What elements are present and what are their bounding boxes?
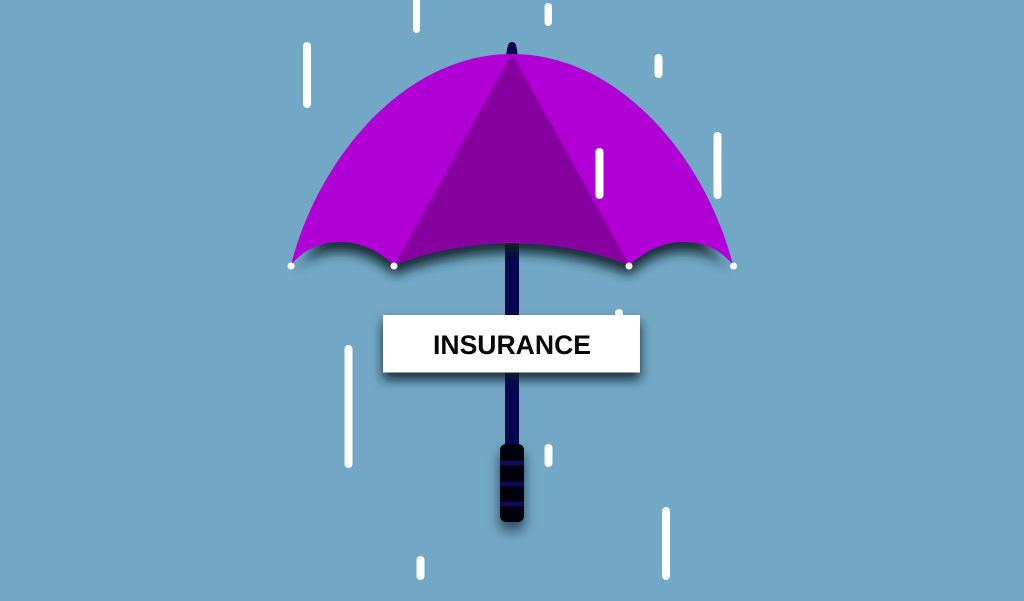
umbrella: [288, 42, 737, 522]
umbrella pole: [505, 240, 519, 450]
umbrella handle: [500, 444, 524, 522]
sign board: [383, 315, 640, 372]
umbrella canopy: [291, 54, 733, 265]
canopy outer panels: [291, 54, 733, 265]
canopy shadow: [293, 200, 731, 275]
raindrops: [303, 0, 722, 580]
canopy rib tips: [288, 262, 737, 270]
sign label: INSURANCE: [433, 330, 591, 360]
umbrella tip: [506, 42, 518, 56]
canopy centre panel: [395, 54, 629, 264]
insurance sign: [383, 315, 640, 372]
